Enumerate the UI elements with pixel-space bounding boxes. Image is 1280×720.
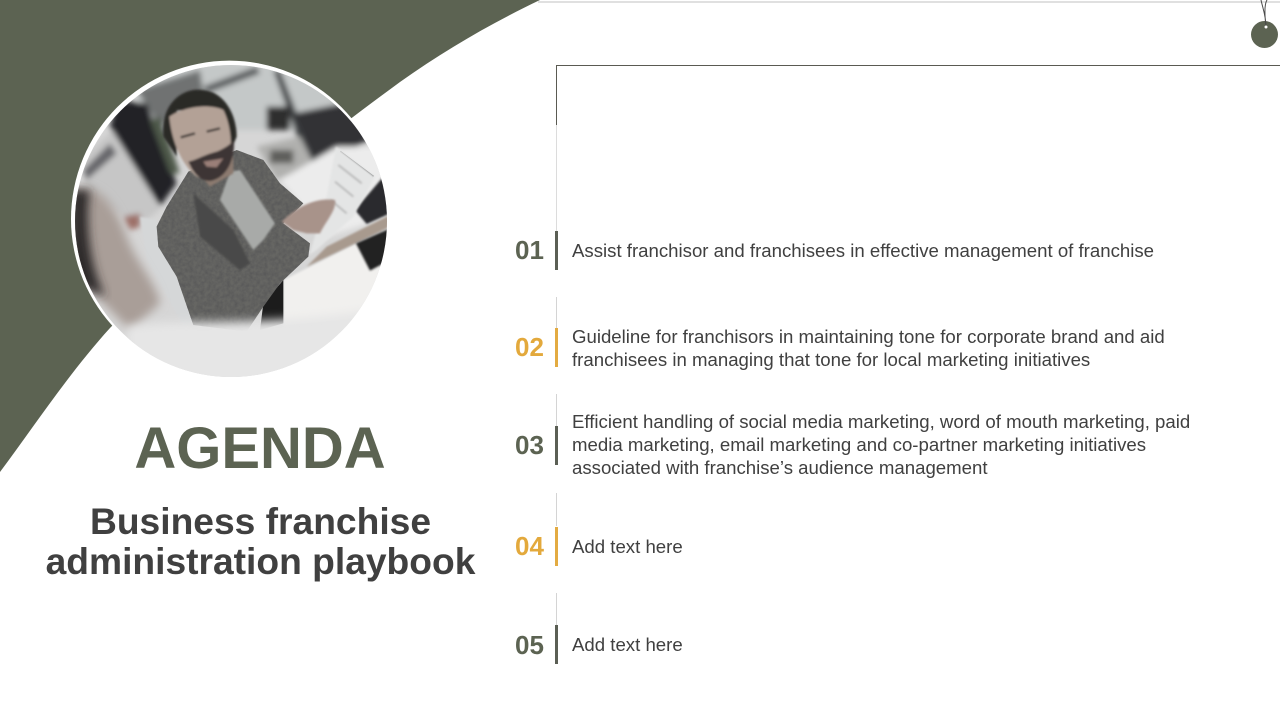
- agenda item 02: franchisees in managing that tone for local marketing initiatives: [572, 349, 1090, 370]
- chair: [139, 216, 147, 228]
- subtitle: [46, 500, 476, 582]
- agenda item 01: 01: [515, 235, 544, 265]
- agenda item 04: Add text here: [572, 536, 683, 557]
- paper: [309, 147, 375, 255]
- subtitle: Business franchise: [90, 500, 431, 542]
- agenda item 03: [515, 394, 1190, 478]
- desk: [284, 228, 386, 322]
- top rule: [538, 1, 1280, 3]
- agenda item 01: Assist franchisor and franchisees in effective management of franchise: [572, 240, 1154, 261]
- hand: [282, 199, 335, 233]
- agenda item 03: associated with franchise’s audience management: [572, 457, 988, 478]
- beard: [188, 140, 234, 181]
- agenda item 05: [515, 593, 683, 664]
- agenda item 02: Guideline for franchisors in maintaining tone for corporate brand and aid: [572, 326, 1165, 347]
- photo: man with headset reviewing a document: [71, 60, 387, 377]
- agenda item 03: media marketing, email marketing and co-partner marketing initiatives: [572, 434, 1146, 455]
- face: [169, 107, 231, 178]
- keyboard: [355, 177, 390, 224]
- agenda item 02: [515, 297, 1165, 370]
- frame line: [556, 65, 1280, 231]
- agenda item 05: Add text here: [572, 634, 683, 655]
- agenda item 01: [515, 231, 1154, 270]
- agenda item 03: 03: [515, 430, 544, 460]
- agenda item 03: Efficient handling of social media marketing, word of mouth marketing, paid: [572, 411, 1190, 432]
- title: AGENDA: [134, 416, 386, 481]
- neck: [204, 156, 234, 187]
- agenda item 04: [515, 493, 683, 566]
- subtitle: administration playbook: [46, 540, 475, 582]
- foreground person: [73, 188, 160, 330]
- agenda item 02: 02: [515, 332, 544, 362]
- shirt: [220, 170, 275, 250]
- icon: hanging tag: [1251, 0, 1278, 48]
- agenda item 04: 04: [515, 531, 544, 561]
- jacket: [157, 150, 310, 332]
- agenda item 05: 05: [515, 630, 544, 660]
- hair and headset: [163, 90, 237, 157]
